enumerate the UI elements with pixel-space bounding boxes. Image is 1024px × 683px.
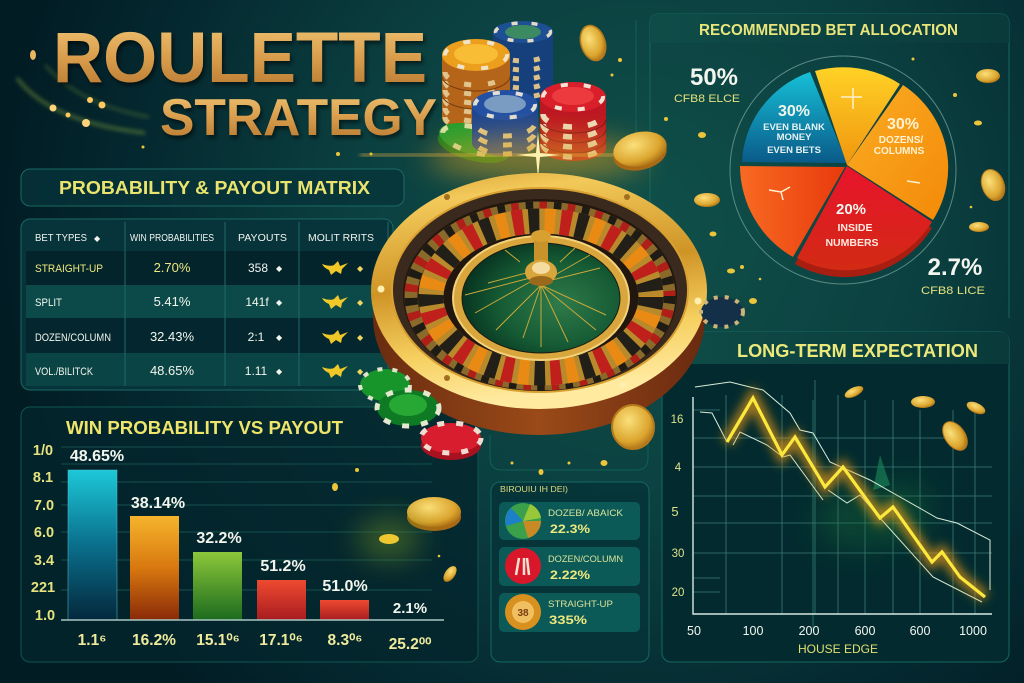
item: straight-up: 38 [517, 608, 529, 619]
item: dozen/column: DOZEN/COLUMN [548, 554, 623, 565]
x axis labels: 25.2⁰⁰ [389, 636, 432, 653]
row: dozen/column: DOZEN/COLUMN [35, 332, 111, 344]
panel: win probability vs payout [21, 407, 478, 662]
wheel base [373, 199, 705, 435]
pie labels: EVEN BETS [767, 145, 821, 156]
chips near wheel [360, 297, 743, 460]
x labels: 1000 [959, 624, 987, 638]
green dome [462, 243, 620, 353]
item: straight-up: STRAIGHT-UP [548, 599, 613, 610]
chart coins [843, 384, 987, 455]
title: STRATEGY [160, 89, 437, 147]
dark chip right [701, 297, 743, 327]
bar 1 [68, 470, 117, 620]
row: straight-up [35, 260, 364, 275]
panel: probability and payout table [21, 219, 393, 390]
callout: 2.7% [921, 254, 985, 297]
item: dozen/abaick: DOZEB/ ABAICK [548, 508, 624, 519]
row: straight-up: ◆ [357, 264, 364, 273]
y axis labels: 221 [31, 580, 55, 596]
row: vol/bilitck: 48.65% [150, 363, 194, 378]
table header: WIN PROBABILITIES [130, 232, 214, 244]
row: vol/bilitck: 1.11 [245, 364, 268, 378]
y labels: 20 [672, 587, 684, 599]
coin [969, 222, 989, 232]
axes [693, 397, 992, 614]
x labels: 200 [799, 624, 819, 638]
bar values: 32.2% [196, 530, 242, 547]
row: dozen/column: 32.43% [150, 329, 194, 344]
golden flare [360, 132, 647, 180]
y axis labels: 1.0 [35, 608, 55, 624]
center frame lines [490, 20, 648, 470]
y axis labels: 7.0 [34, 498, 54, 514]
coin upper middle [610, 127, 670, 175]
chip stacks [434, 21, 606, 169]
main line glow [727, 398, 985, 597]
x labels: 50 [687, 624, 701, 638]
coin top [576, 22, 610, 64]
line chart [671, 380, 992, 656]
pie labels: NUMBERS [825, 237, 879, 249]
inner rim shadow [392, 188, 688, 392]
pie labels: INSIDE [837, 222, 873, 234]
row: straight-up: 2.70% [154, 260, 191, 275]
pocket track [403, 199, 677, 391]
coin bottom center [407, 497, 461, 531]
row: straight-up: ◆ [276, 264, 283, 273]
callout: 50%: 50% [690, 64, 738, 91]
pie labels: 20% [836, 201, 866, 218]
list heading: BIROUIU IH DEI) [500, 484, 568, 494]
pie labels: MONEY [777, 132, 812, 143]
x labels: 600 [910, 624, 930, 638]
panel heading: RECOMMENDED BET ALLOCATION [699, 22, 958, 39]
callout: 50%: CFB8 ELCE [674, 93, 740, 105]
bar values: 38.14% [131, 495, 185, 512]
panel: long-term expectation [662, 332, 1009, 662]
stack: red chips [540, 82, 606, 161]
panel: recommended bet allocation [650, 14, 1009, 318]
panel: bet summary list [491, 482, 649, 662]
y labels: 16 [671, 414, 683, 426]
slice: dozens [847, 85, 948, 220]
row: dozen/column: 2:1 [248, 330, 265, 344]
panel: matrix heading: PROBABILITY & PAYOUT MATRIX [59, 177, 371, 198]
coins around pie [332, 58, 1009, 557]
center spindle [525, 230, 557, 286]
x axis labels: 16.2% [132, 632, 176, 649]
x axis labels: 15.1⁰⁶ [196, 632, 240, 649]
bar 5 [320, 600, 369, 620]
coin [694, 193, 720, 207]
slice: inside numbers [797, 166, 932, 270]
dome spokes [465, 248, 606, 347]
row: vol/bilitck: ◆ [357, 367, 364, 376]
coin [976, 69, 1000, 83]
item: dozen/abaick [499, 502, 640, 540]
row: vol/bilitck: ◆ [276, 367, 283, 376]
pie labels: 30% [887, 116, 919, 133]
row: split: ◆ [357, 298, 364, 307]
coin near wheel base [612, 405, 654, 449]
row: vol/bilitck: VOL./BILITCK [35, 366, 94, 378]
y axis labels: 3.4 [34, 553, 54, 569]
x axis labels [78, 632, 432, 653]
callout: 2.7%: 2.7% [928, 254, 982, 281]
bar values: 48.65% [70, 448, 124, 465]
sparks [332, 58, 982, 557]
item: dozen/column: 2.22% [550, 568, 590, 582]
bar values [70, 448, 427, 617]
bar values: 51.2% [260, 558, 306, 575]
chart gridlines and bars [61, 447, 444, 620]
item: straight-up: 335% [549, 613, 587, 627]
table header: BET TYPES [35, 232, 87, 244]
green glow [815, 490, 905, 550]
x axis title: HOUSE EDGE [798, 642, 878, 656]
bar values: 51.0% [322, 578, 368, 595]
slice: top yellow [815, 67, 900, 165]
stack: gold chips [442, 39, 510, 131]
x labels: 100 [743, 624, 763, 638]
y labels: 30 [672, 548, 684, 560]
title: ROULETTE [53, 19, 427, 98]
y axis labels: 1/0 [33, 443, 53, 459]
table header: ◆ [94, 234, 101, 243]
bar values: 2.1% [393, 600, 427, 617]
x labels [687, 624, 987, 638]
row: split: SPLIT [35, 297, 62, 309]
pie labels: DOZENS/ [879, 135, 923, 146]
table header [35, 232, 374, 244]
panel heading: LONG-TERM EXPECTATION [737, 340, 978, 361]
bar 2 [130, 516, 179, 620]
row: dozen/column: ◆ [357, 333, 364, 342]
callout: 2.7%: CFB8 LICE [921, 285, 985, 297]
gold nugget glow [357, 517, 421, 561]
gold swoosh streaks [17, 50, 149, 148]
chart heading: WIN PROBABILITY VS PAYOUT [66, 417, 344, 438]
slice: even money [742, 72, 847, 163]
chip: green flat [434, 117, 515, 169]
thin white lines [695, 382, 990, 602]
row: split: 5.41% [154, 294, 191, 309]
x axis labels: 1.1⁶ [78, 632, 106, 649]
row: straight-up: STRAIGHT-UP [35, 263, 103, 275]
green chip front [377, 390, 439, 426]
title [53, 19, 437, 147]
row: dozen/column: ◆ [276, 333, 283, 342]
callout: 50% [674, 64, 740, 105]
rim studs [378, 286, 384, 292]
slice: orange red [740, 166, 845, 257]
x labels: 600 [855, 624, 875, 638]
gold inner ring [453, 236, 629, 360]
table header: MOLIT RRITS [308, 232, 374, 244]
y labels: 4 [675, 462, 682, 474]
gold rim [371, 173, 707, 409]
x axis labels: 17.1⁰⁶ [259, 632, 303, 649]
y axis labels: 6.0 [34, 525, 54, 541]
pie labels: EVEN BLANK [763, 122, 825, 133]
pie chart [730, 56, 956, 284]
y axis labels [31, 443, 55, 624]
stack: blue chips front [472, 90, 538, 156]
row: dozen/column [35, 329, 364, 344]
row: split [35, 294, 364, 309]
main line [727, 398, 985, 597]
small coin [441, 564, 459, 584]
pie labels: COLUMNS [874, 146, 925, 157]
row: split: 141f [245, 295, 269, 309]
bar 4 [257, 580, 306, 620]
panel: matrix heading [21, 169, 404, 206]
red chip [421, 430, 481, 460]
table header: PAYOUTS [238, 232, 287, 244]
bar 3 [193, 552, 242, 620]
item: straight-up [499, 593, 640, 632]
y axis labels: 8.1 [33, 470, 53, 486]
item: dozen/column [499, 547, 640, 586]
y labels: 5 [671, 504, 679, 519]
roulette wheel [371, 173, 707, 435]
item: dozen/abaick: 22.3% [550, 522, 590, 536]
x axis labels: 8.3⁰⁶ [328, 632, 362, 649]
stack: blue chips back [493, 21, 553, 103]
row: split: ◆ [276, 298, 283, 307]
grid [693, 380, 992, 614]
row: straight-up: 358 [248, 261, 268, 275]
coin [977, 166, 1009, 204]
row: vol/bilitck [35, 363, 364, 378]
green chip back [360, 369, 410, 401]
pie labels [763, 103, 925, 249]
y labels [671, 414, 684, 599]
pie labels: 30% [778, 103, 810, 120]
